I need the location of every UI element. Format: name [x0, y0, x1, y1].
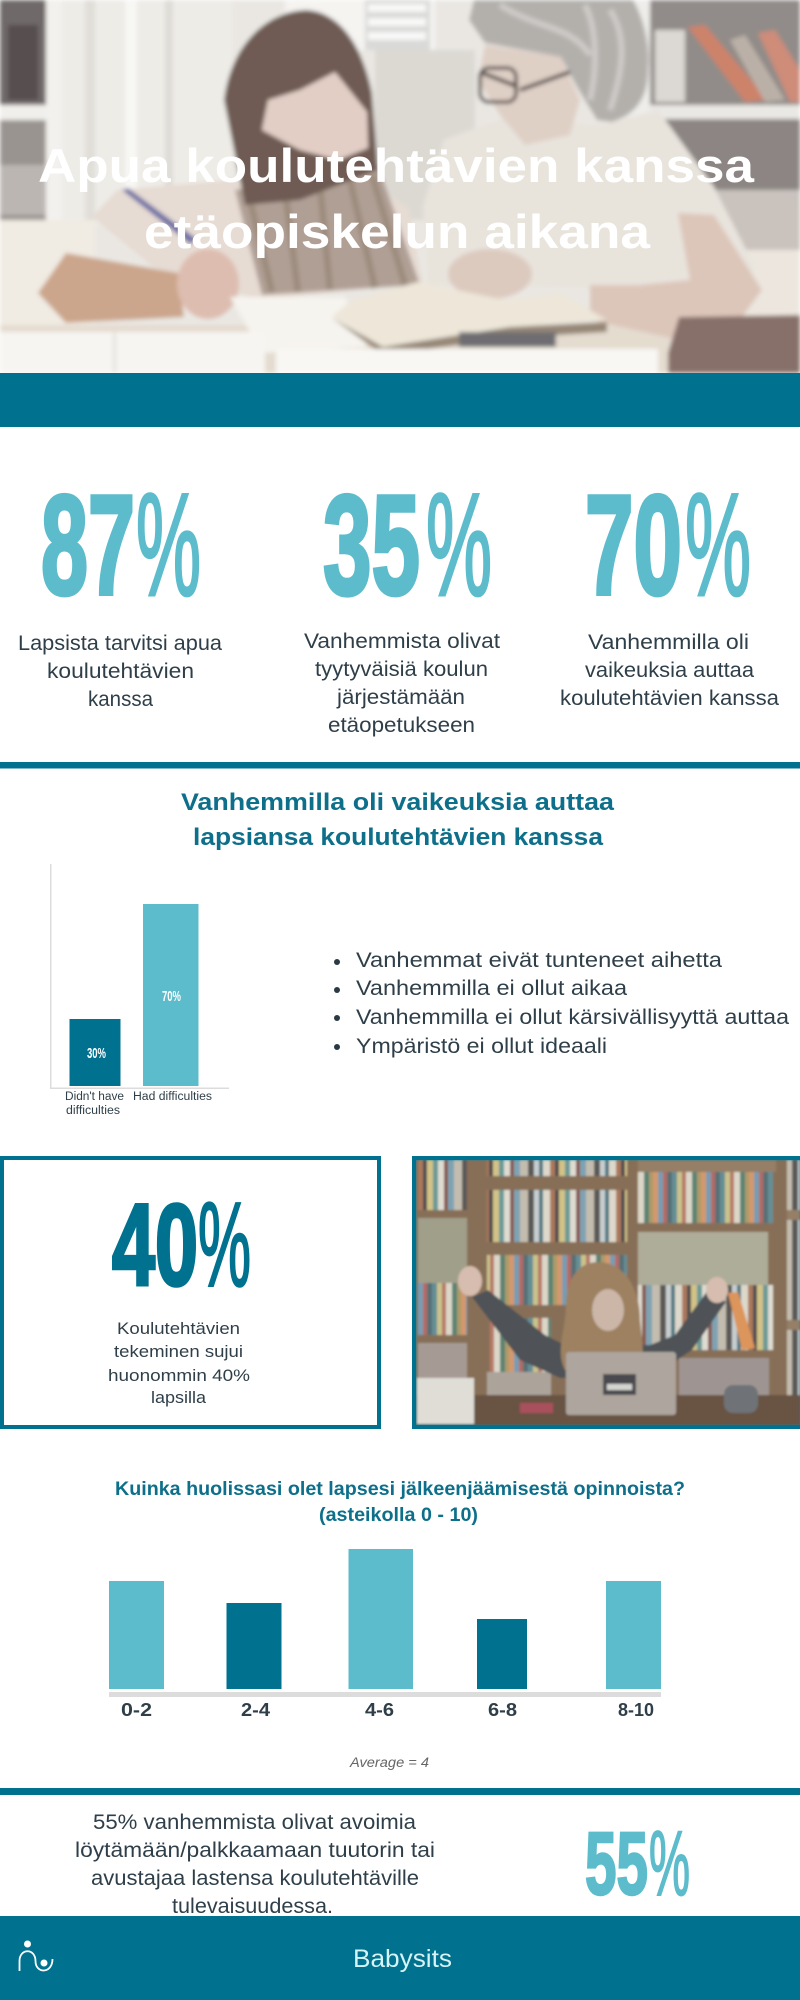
heading: parents had difficulties [181, 789, 615, 851]
bullet list: reasons [334, 949, 789, 1058]
bullet list: reasons: Ympäristö ei ollut ideaali [356, 1035, 607, 1058]
note: average: Average = 4 [349, 1755, 429, 1770]
grandmother [424, 114, 746, 260]
stat: 87%: koulutehtävien [47, 660, 194, 683]
category labels: 4-6 [365, 1700, 394, 1720]
category labels: 8-10 [618, 1700, 654, 1720]
big number 40%: 40 [112, 1180, 198, 1310]
heading: how worried: (asteikolla 0 - 10) [319, 1504, 478, 1526]
desk and objects [474, 1394, 800, 1425]
stat: 87%: 87 [41, 466, 135, 625]
stat: 35%: tyytyväisiä koulun [315, 658, 488, 681]
stat: 35%: % [426, 463, 492, 626]
books [230, 297, 367, 353]
brand name: Babysits [353, 1945, 452, 1973]
axis labels: difficulties [66, 1105, 120, 1117]
bar: 6-8 [477, 1619, 527, 1689]
heading: parents had difficulties: lapsiansa koulutehtävien kanssa [193, 824, 604, 851]
category labels: 2-4 [241, 1700, 270, 1720]
panel: 40% stat box: % [198, 1178, 251, 1312]
bar: 4-6 [348, 1549, 413, 1689]
bar: 70% [143, 904, 198, 1086]
bar: 0-2 [109, 1581, 164, 1689]
stat: 87%: kanssa [88, 688, 153, 711]
bullet list: reasons: Vanhemmilla ei ollut aikaa [356, 977, 627, 1000]
axis labels: Had difficulties [133, 1091, 212, 1103]
hero banner [0, 0, 800, 427]
bar: 70%: 70% [162, 988, 181, 1005]
panel: 40% stat box [2, 1158, 379, 1427]
bullet list: reasons: Vanhemmilla ei ollut kärsivällisyyttä auttaa [356, 1006, 789, 1029]
heading: how worried [115, 1478, 685, 1526]
teal band [0, 373, 800, 427]
stat: 35%: järjestämään [336, 686, 465, 709]
stat: 70%: 70 [585, 466, 682, 625]
stat: 87% [18, 463, 222, 711]
category labels: 0-2 [121, 1700, 152, 1720]
stat description: lapsilla [151, 1388, 207, 1407]
stat: 70%: koulutehtävien kanssa [560, 687, 779, 710]
big number 55%: % [649, 1813, 690, 1915]
hero title [38, 139, 755, 258]
bar: 2-4 [226, 1603, 282, 1689]
stat: 35% [304, 463, 500, 737]
panel: three key statistics [18, 463, 779, 737]
heading: parents had difficulties: Vanhemmilla oli vaikeuksia auttaa [181, 789, 615, 816]
stat: 70% [560, 463, 779, 710]
heading: how worried: Kuinka huolissasi olet lapsesi jälkeenjäämisestä opinnoista? [115, 1478, 685, 1500]
girl [92, 180, 423, 300]
category labels [121, 1700, 654, 1720]
stat: 70%: Vanhemmilla oli [588, 631, 749, 654]
stat: 70%: vaikeuksia auttaa [585, 659, 754, 682]
photo panel: girl at laptop before bookshelves [412, 1156, 800, 1429]
bar: 8-10 [606, 1581, 661, 1689]
stat description: 55% vanhemmista olivat avoimia [93, 1811, 416, 1834]
stat description: avustajaa lastensa koulutehtäville [91, 1867, 419, 1890]
category labels: 6-8 [488, 1700, 517, 1720]
person [472, 1290, 726, 1378]
stat: 87%: Lapsista tarvitsi apua [18, 632, 222, 655]
bar: 30% [70, 1019, 120, 1086]
stat: 87%: % [136, 463, 201, 626]
bullet list: reasons: Vanhemmat eivät tunteneet aihetta [356, 949, 722, 972]
stat description: tekeminen sujui [114, 1342, 243, 1361]
stat description [108, 1319, 250, 1407]
stat: 35%: Vanhemmista olivat [304, 630, 500, 653]
stat description [75, 1811, 435, 1918]
bar chart: worry scale [109, 1549, 661, 1720]
icon: babysitter logo [20, 1940, 52, 1971]
big number 55%: 55 [585, 1813, 648, 1913]
stat description: Koulutehtävien [117, 1319, 240, 1338]
stat description: huonommin 40% [108, 1366, 250, 1385]
bar chart: difficulties helping [50, 864, 229, 1117]
hero photo: girl and grandmother reading [0, 0, 800, 373]
bar: 30%: 30% [87, 1045, 106, 1062]
hero title: etäopiskelun aikana [144, 205, 651, 258]
stat: 35%: etäopetukseen [328, 714, 475, 737]
axis labels: Didn't have [65, 1091, 124, 1103]
footer band [0, 1916, 800, 2000]
stat description: löytämään/palkkaamaan tuutorin tai [75, 1839, 435, 1862]
panel: 55% tutor stat [75, 1811, 690, 1918]
stat: 35%: 35 [323, 466, 420, 625]
axis labels [65, 1091, 212, 1117]
stat description: tulevaisuudessa. [172, 1895, 333, 1918]
hero title: Apua koulutehtävien kanssa [38, 139, 755, 192]
